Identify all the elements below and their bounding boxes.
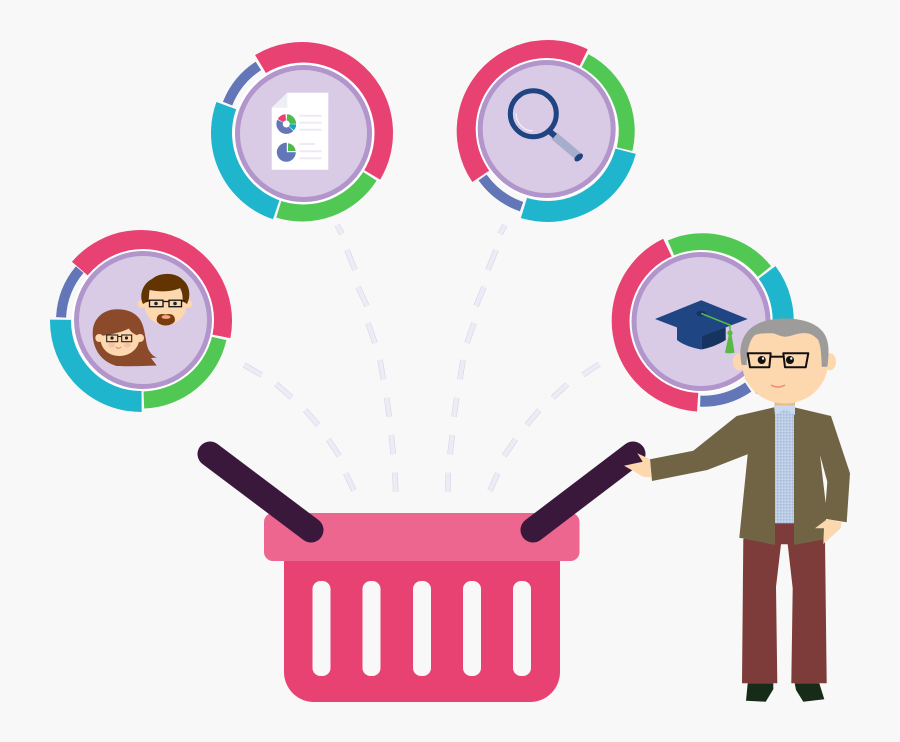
basket rim	[264, 513, 580, 561]
basket slots	[312, 581, 531, 676]
man presenting	[624, 318, 850, 702]
ring: people	[27, 207, 255, 435]
basket handles	[210, 454, 633, 530]
glasses	[748, 353, 808, 367]
dashed connector lines	[244, 225, 599, 492]
ring: education	[590, 208, 815, 433]
basket body	[284, 555, 560, 702]
mouth	[771, 385, 785, 387]
icon: graduation cap	[655, 300, 748, 353]
basket	[210, 454, 633, 702]
icon: report document with pie charts	[272, 93, 328, 170]
neck and collar	[774, 396, 795, 407]
ring: search	[436, 19, 659, 243]
shoes	[746, 683, 824, 702]
hands	[624, 453, 651, 477]
eyes	[758, 356, 766, 364]
trousers	[742, 523, 827, 683]
ring: report	[192, 23, 412, 243]
shirt	[775, 408, 794, 523]
hair	[740, 318, 829, 367]
jacket	[650, 407, 850, 545]
head	[733, 353, 745, 370]
icon: man and woman faces	[93, 274, 192, 366]
icon: magnifying glass	[510, 91, 584, 163]
